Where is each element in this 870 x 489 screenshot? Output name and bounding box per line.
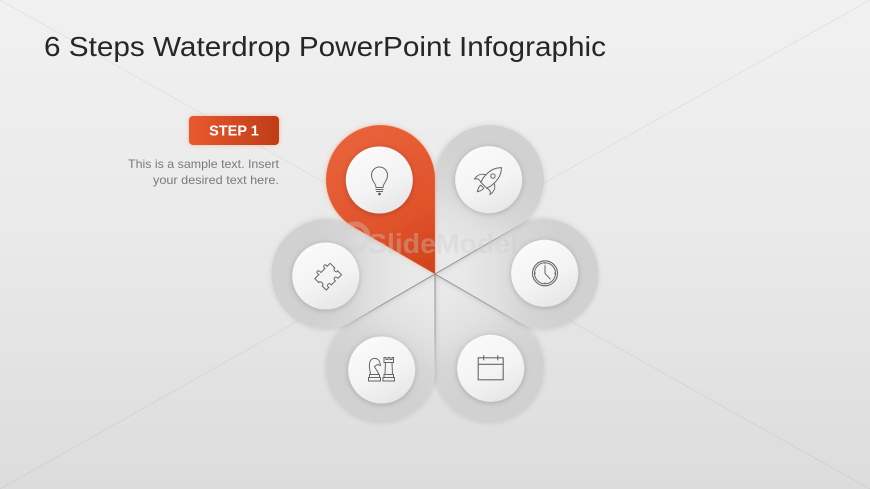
watermark: .com: [518, 245, 540, 256]
drop 1: highlighted orange petal: [306, 105, 482, 301]
step 1 description: your desired text here.: [153, 173, 279, 187]
disc 4: [457, 335, 524, 402]
step 1 description: This is a sample text. Insert: [128, 157, 280, 171]
disc 5: [348, 336, 415, 404]
step 1 description: [128, 157, 280, 187]
drop 5: chess petal: [306, 247, 482, 443]
icon: calendar: [478, 355, 503, 380]
disc 2: [455, 146, 522, 213]
step 1 label button: STEP 1: [209, 124, 259, 140]
drop 2: rocket petal: [388, 105, 564, 301]
disc 6: [292, 242, 359, 310]
icon: chess pieces: [368, 358, 394, 381]
watermark: SlideModel: [368, 228, 518, 259]
disc 3: [511, 240, 578, 307]
drop 3: clock petal: [435, 220, 598, 328]
watermark: [342, 224, 540, 259]
waterdrop flower: [272, 105, 598, 443]
title: 6 Steps Waterdrop PowerPoint Infographic: [44, 31, 606, 62]
drop 6: puzzle petal: [272, 220, 435, 328]
icon: clock: [532, 261, 558, 286]
icon: puzzle piece: [312, 261, 342, 290]
step 1 label button: [189, 116, 279, 145]
icon: light bulb: [372, 167, 388, 195]
drop 4: calendar petal: [388, 247, 564, 443]
icon: rocket: [469, 160, 509, 200]
disc 1: [346, 146, 413, 214]
